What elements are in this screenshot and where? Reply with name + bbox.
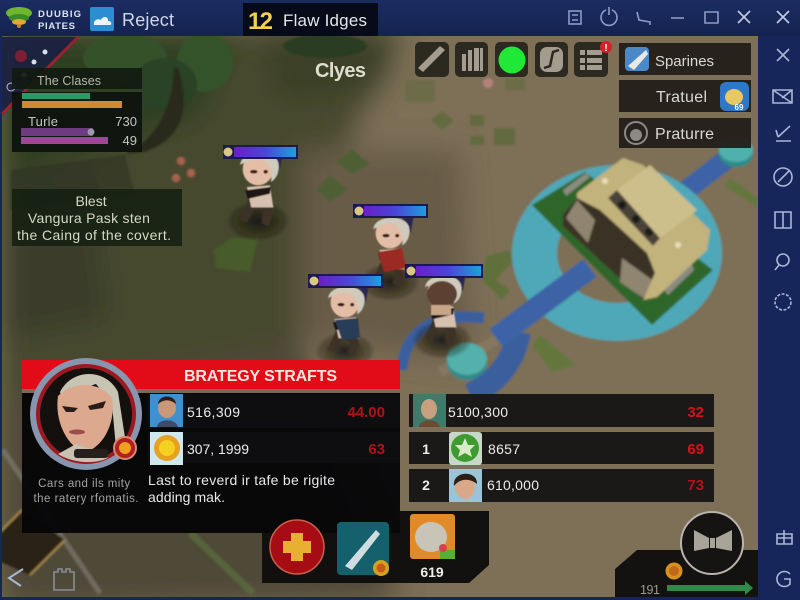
ground shading <box>0 30 470 600</box>
portrait caption: the ratery rfomatis. <box>34 493 138 505</box>
button: bow <box>681 512 743 574</box>
text block: mission note: Vangura Pask sten <box>28 210 150 226</box>
sign post lower left <box>0 450 253 593</box>
leaderboard row 2 <box>409 432 714 465</box>
header banner <box>22 360 400 393</box>
side menu: Praturre: Praturre <box>655 126 714 143</box>
health bar 3 <box>308 274 383 288</box>
icon: cloud app <box>90 7 114 31</box>
icon: green status <box>498 46 526 74</box>
panel: class stats: 730 <box>115 114 137 129</box>
icon: share <box>9 569 23 586</box>
icon: pencil <box>418 46 445 72</box>
leaderboard row 2: 69 <box>687 441 704 458</box>
toolbar icons <box>415 41 612 77</box>
hero character 3 <box>315 284 375 370</box>
tree foliage <box>10 32 367 210</box>
leaderboard row 3: 73 <box>687 477 704 494</box>
level badge: 12 <box>248 8 273 35</box>
panel: class stats <box>12 68 142 152</box>
icon: curve tile <box>540 47 563 72</box>
row 1 <box>148 394 400 428</box>
teal capture circle <box>512 165 722 341</box>
bottom-right action <box>615 512 758 597</box>
leaderboard row 3: 2 <box>422 477 430 493</box>
flowers <box>172 78 493 182</box>
side menu: Sparines: Sparines <box>655 53 714 70</box>
button: red plus <box>270 520 324 574</box>
portrait caption: Cars and ils mity <box>38 478 130 490</box>
row 2: 63 <box>368 441 385 458</box>
text block: mission note <box>12 189 182 246</box>
green arrow <box>667 581 753 595</box>
leaderboard row 3: 610,000 <box>487 477 539 493</box>
side menu: Tratuel: Tratuel <box>656 89 707 106</box>
header banner: BRATEGY STRAFTS <box>184 368 337 385</box>
row 1: 44.00 <box>347 404 385 421</box>
heading: map label: Clyes <box>315 60 366 82</box>
grass tiles <box>214 78 758 372</box>
leaderboard row 2: 8657 <box>488 441 520 457</box>
side menu: Tratuel <box>619 80 751 112</box>
blue path crossing <box>496 268 590 338</box>
row 1: 516,309 <box>187 404 240 420</box>
base building <box>532 158 713 325</box>
health bar 1 <box>223 145 298 159</box>
corner decoration <box>2 37 78 115</box>
resource count: 191 <box>640 583 660 597</box>
purple bars <box>21 128 108 144</box>
bottom action bar <box>262 511 489 583</box>
item card: 619 <box>420 564 444 580</box>
green and orange bars <box>22 93 122 108</box>
app name: DUUBIG <box>38 9 81 20</box>
item card <box>410 514 455 580</box>
window title bar <box>0 0 800 36</box>
side menu: Tratuel: 69 <box>735 103 744 112</box>
strategy note: adding mak. <box>148 489 225 505</box>
side menu: Praturre <box>619 118 751 148</box>
icon: coin <box>666 562 682 580</box>
leaderboard row 1: 32 <box>687 404 704 421</box>
panel: strategy <box>22 358 400 533</box>
icon: list with alert: ! <box>604 43 608 54</box>
row 2 <box>148 432 400 465</box>
leaderboard row 1 <box>409 394 714 427</box>
leaderboard row 2: 1 <box>422 441 430 457</box>
leaderboard row 1: 5100,300 <box>448 404 508 420</box>
side menu: Sparines <box>619 43 751 75</box>
leaderboard row 3 <box>409 469 714 502</box>
panel: class stats: Turle <box>28 114 58 129</box>
health bar 4 <box>405 264 483 278</box>
text block: mission note: the Caing of the covert. <box>17 227 171 243</box>
icon: bars <box>462 48 483 71</box>
button: teal wrench <box>337 522 389 576</box>
teal buttons <box>447 138 753 380</box>
icon: list with alert <box>580 41 612 70</box>
window controls <box>569 7 789 25</box>
hero character 2 <box>360 215 420 301</box>
icon: folder <box>54 569 74 590</box>
blue path <box>402 152 736 395</box>
level badge: Flaw Idges <box>283 11 367 30</box>
health bar 2 <box>353 204 428 218</box>
window title: Reject <box>122 10 174 30</box>
level badge <box>243 3 378 36</box>
portrait <box>30 358 142 470</box>
text block: mission note: Blest <box>75 193 107 209</box>
row 2: 307, 1999 <box>187 441 249 457</box>
hero character 1 <box>226 150 290 241</box>
panel: class stats: 49 <box>123 133 137 148</box>
hero character 4 <box>412 273 472 359</box>
strategy note: Last to reverd ir tafe be rigite <box>148 472 335 488</box>
icon: app logo <box>6 7 32 28</box>
panel: class stats: The Clases <box>37 74 101 88</box>
app name: PIATES <box>38 21 75 32</box>
